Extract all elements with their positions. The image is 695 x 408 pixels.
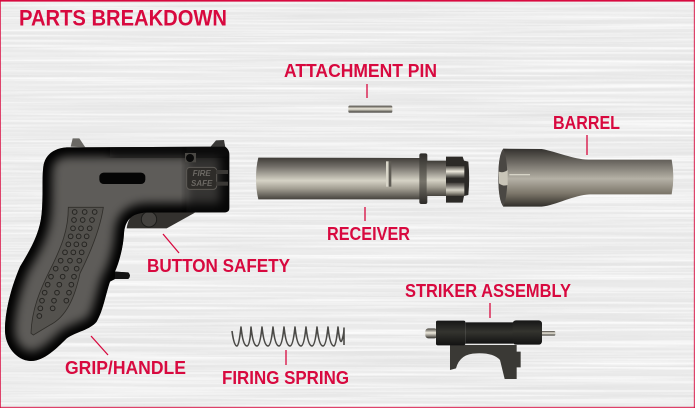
label: barrel: BARREL [553, 113, 620, 133]
label: firing spring: FIRING SPRING [222, 368, 349, 388]
part: receiver and barrel [256, 106, 673, 207]
part: firing spring [232, 327, 344, 346]
rear sight [71, 138, 85, 147]
logo plate [187, 167, 228, 189]
pin hole [185, 153, 196, 162]
part: striker assembly [425, 320, 555, 379]
logo plate: FIRE [193, 169, 211, 178]
label: receiver: RECEIVER [327, 224, 410, 244]
label: button safety: BUTTON SAFETY [147, 256, 290, 276]
part: pistol body with grip [5, 138, 233, 361]
button safety plate [127, 210, 195, 228]
leader lines [91, 84, 587, 365]
attachment pin [348, 106, 392, 113]
front sight [210, 140, 225, 147]
ejection slot [99, 173, 145, 184]
label: grip/handle: GRIP/HANDLE [65, 358, 186, 378]
barrel [498, 149, 673, 207]
title: PARTS BREAKDOWN [19, 6, 227, 30]
label: striker assembly: STRIKER ASSEMBLY [405, 281, 571, 301]
body shell [5, 147, 229, 361]
logo plate: SAFE [191, 179, 213, 188]
label: attachment pin: ATTACHMENT PIN [284, 61, 437, 81]
receiver [256, 153, 469, 204]
grip texture panel [31, 207, 103, 335]
